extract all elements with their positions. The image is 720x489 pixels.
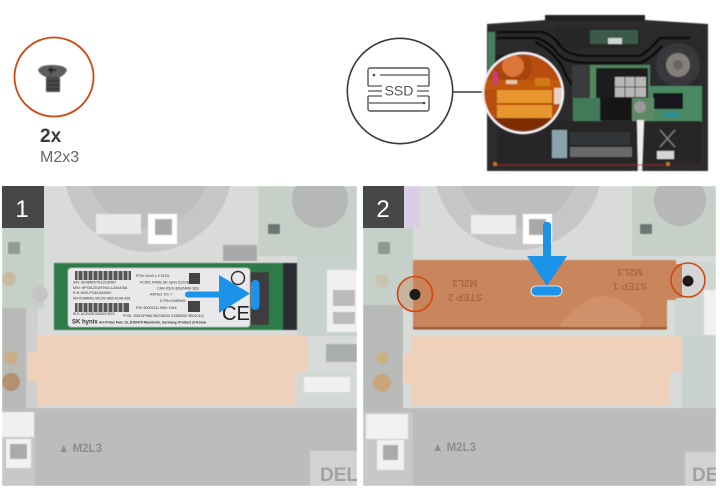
SSD label text: CAN ICES-3(B)/NMB-3(B) [157,286,199,290]
SSD label text: FW: 80002111 WW: 1944 [136,306,177,310]
embossed shield text: M2L3 [617,266,643,277]
panel: step 2 [363,186,716,486]
label: M2L3: ▲ M2L3 [432,442,476,454]
embossed shield text: STEP 2 [447,291,482,302]
SSD label text [72,271,250,326]
icon: screw callout circle [14,38,94,116]
label: DELL: DE [692,465,718,486]
SSD label text: PSID: 2MZOP568 0NO28000 21985000 9B010111 [123,314,204,318]
step 2 badge [363,186,404,228]
SSD label text: M/N: HFS512GD9TNG-L2A0A BA [73,286,128,290]
SSD label text: CE [222,303,250,325]
step 1 badge: 1 [15,196,29,223]
SSD module [54,263,297,330]
step 1 background photo [2,186,357,486]
arrow: insert SSD [185,275,260,313]
panel: step 1 [2,186,357,486]
SSD label text: D P/N 0V8RMG [160,299,186,303]
SSD label text: EUI: ACE42E0056210879 [73,312,115,316]
copper shield being installed [413,260,676,330]
SSD label text: KR-0V8RMG-SK200-9B5-010A-A01 [73,296,131,300]
SSD label text: R-R-HNX-PC601M2800 [73,291,111,295]
icon: SSD callout circle: SSD [385,82,413,98]
label: M2L3: ▲ M2L3 [58,443,102,455]
connector line [453,91,484,93]
step 1 badge [2,186,44,228]
SSD label text: S/N: AD98N007611916087 [73,280,116,284]
light copper shield [28,335,307,405]
arrow: lower shield [527,222,567,296]
SSD label text: SK hynix [72,320,98,326]
light copper shield [403,336,682,405]
step 2 badge: 2 [376,196,390,223]
SSD label text: PCIe Gen3 x 4 512G [136,274,170,278]
label: DELL: DEL [320,465,358,486]
inset: magnified SSD area [482,47,566,134]
screw 2 with highlight [671,263,705,298]
SSD label text: RATED: DC + [150,292,172,296]
screw 1 with highlight [398,276,432,312]
screw size: M2x3 [40,149,79,166]
laptop base photo [487,15,708,171]
SSD label text: Am Prime Parc 13, D-65479 Raunheim, Germany, Product of Korea [99,320,206,324]
icon: SSD callout circle [347,38,453,144]
SSD label text: PC601 NVMe SK hynix 512GB [140,280,190,284]
embossed shield text: M2L3 [452,277,478,288]
embossed shield text [448,269,647,301]
screw count: 2x [40,126,62,147]
embossed shield text: STEP 1 [612,280,647,291]
step 2 background photo [363,186,716,486]
